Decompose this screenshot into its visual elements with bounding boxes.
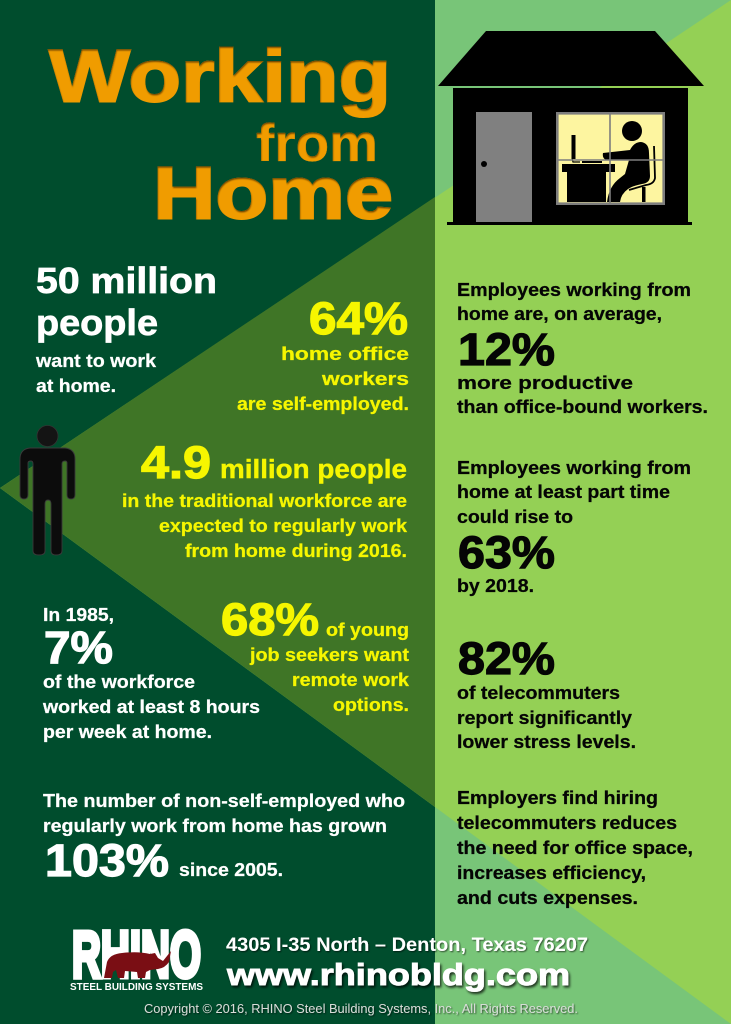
website url: www.rhinobldg.com — [226, 957, 570, 992]
text block: employers: increases efficiency, — [457, 862, 646, 883]
icon: door — [476, 112, 532, 222]
stat: 12% more productive: home are, on average, — [457, 303, 662, 324]
text block: employers: Employers find hiring — [457, 787, 658, 808]
stat: 68% young job seekers — [221, 594, 410, 715]
stat: 4.9 million people: million people — [220, 456, 407, 484]
logo: RHINO Steel Building Systems: STEEL BUILDING SYSTEMS — [70, 982, 203, 993]
logo: RHINO Steel Building Systems: RHINO — [72, 917, 201, 991]
stat: 68% young job seekers: 68% — [221, 594, 319, 645]
stat: 7% in 1985 — [42, 604, 260, 742]
stat: 50 million people: 50 million — [36, 260, 217, 301]
stat: 63% by 2018: home at least part time — [457, 481, 670, 502]
stat: 64% self-employed: workers — [321, 368, 409, 389]
title: from — [256, 114, 378, 173]
stat: 63% by 2018: could rise to — [457, 506, 573, 527]
stat: 7% in 1985: worked at least 8 hours — [42, 696, 260, 717]
icon: lit window with person at desk — [556, 112, 665, 205]
stat: 4.9 million people: expected to regularly work — [159, 515, 408, 536]
stat: 7% in 1985: per week at home. — [43, 721, 212, 742]
stat: 4.9 million people: in the traditional workforce are — [122, 490, 407, 511]
stat: 12% more productive: than office-bound workers. — [457, 396, 708, 417]
stat: 103% growth since 2005: 103% — [45, 835, 169, 886]
stat: 103% growth since 2005: since 2005. — [179, 859, 283, 880]
stat: 7% in 1985: 7% — [44, 622, 113, 673]
stat: 7% in 1985: of the workforce — [43, 671, 195, 692]
stat: 68% young job seekers: options. — [333, 694, 409, 715]
text block: employers: telecommuters reduces — [457, 812, 677, 833]
text block: employers: the need for office space, — [457, 837, 693, 858]
stat: 82% lower stress: lower stress levels. — [457, 731, 636, 752]
stat: 64% self-employed: 64% — [309, 293, 408, 344]
stat: 4.9 million people: 4.9 — [141, 437, 211, 488]
stat: 7% in 1985: In 1985, — [43, 604, 114, 625]
stat: 82% lower stress: 82% — [458, 633, 555, 684]
stat: 82% lower stress: of telecommuters — [457, 682, 620, 703]
stat: 12% more productive: Employees working from — [457, 279, 691, 300]
stat: 82% lower stress — [457, 633, 636, 752]
stat: 103% growth since 2005: The number of non-self-employed who — [43, 790, 405, 811]
stat: 12% more productive — [457, 279, 708, 417]
text block: employers: and cuts expenses. — [457, 887, 638, 908]
stat: 63% by 2018: Employees working from — [457, 457, 691, 478]
stat: 68% young job seekers: remote work — [292, 669, 410, 690]
title: Working — [49, 34, 391, 118]
stat: 64% self-employed — [237, 293, 409, 414]
stat: 12% more productive: 12% — [458, 324, 555, 375]
stat: 68% young job seekers: of young — [326, 619, 409, 640]
stat: 68% young job seekers: job seekers want — [249, 644, 409, 665]
text block: employers — [457, 787, 693, 908]
stat: 50 million people: people — [36, 302, 158, 343]
stat: 63% by 2018: by 2018. — [457, 575, 534, 596]
stat: 12% more productive: more productive — [457, 372, 633, 393]
stat: 50 million people — [35, 260, 217, 396]
stat: 103% growth since 2005 — [43, 790, 405, 886]
logo: RHINO Steel Building Systems — [70, 917, 203, 993]
copyright: Copyright © 2016, RHINO Steel Building Systems, Inc., All Rights Reserved. — [144, 1001, 578, 1016]
title — [49, 34, 393, 234]
address: 4305 I-35 North – Denton, Texas 76207 — [226, 935, 588, 956]
stat: 82% lower stress: report significantly — [457, 707, 633, 728]
stat: 103% growth since 2005: regularly work from home has grown — [43, 815, 387, 836]
stat: 64% self-employed: are self-employed. — [237, 393, 409, 414]
icon: house with person working at desk — [438, 31, 704, 225]
stat: 50 million people: at home. — [36, 375, 116, 396]
stat: 50 million people: want to work — [35, 350, 157, 371]
stat: 63% by 2018 — [457, 457, 691, 596]
stat: 63% by 2018: 63% — [458, 527, 555, 578]
title: Home — [153, 152, 393, 234]
stat: 4.9 million people: from home during 2016. — [185, 540, 407, 561]
stat: 4.9 million people — [122, 437, 408, 561]
icon: rhino silhouette — [104, 951, 171, 978]
icon: standing person — [20, 426, 75, 555]
stat: 64% self-employed: home office — [281, 343, 409, 364]
